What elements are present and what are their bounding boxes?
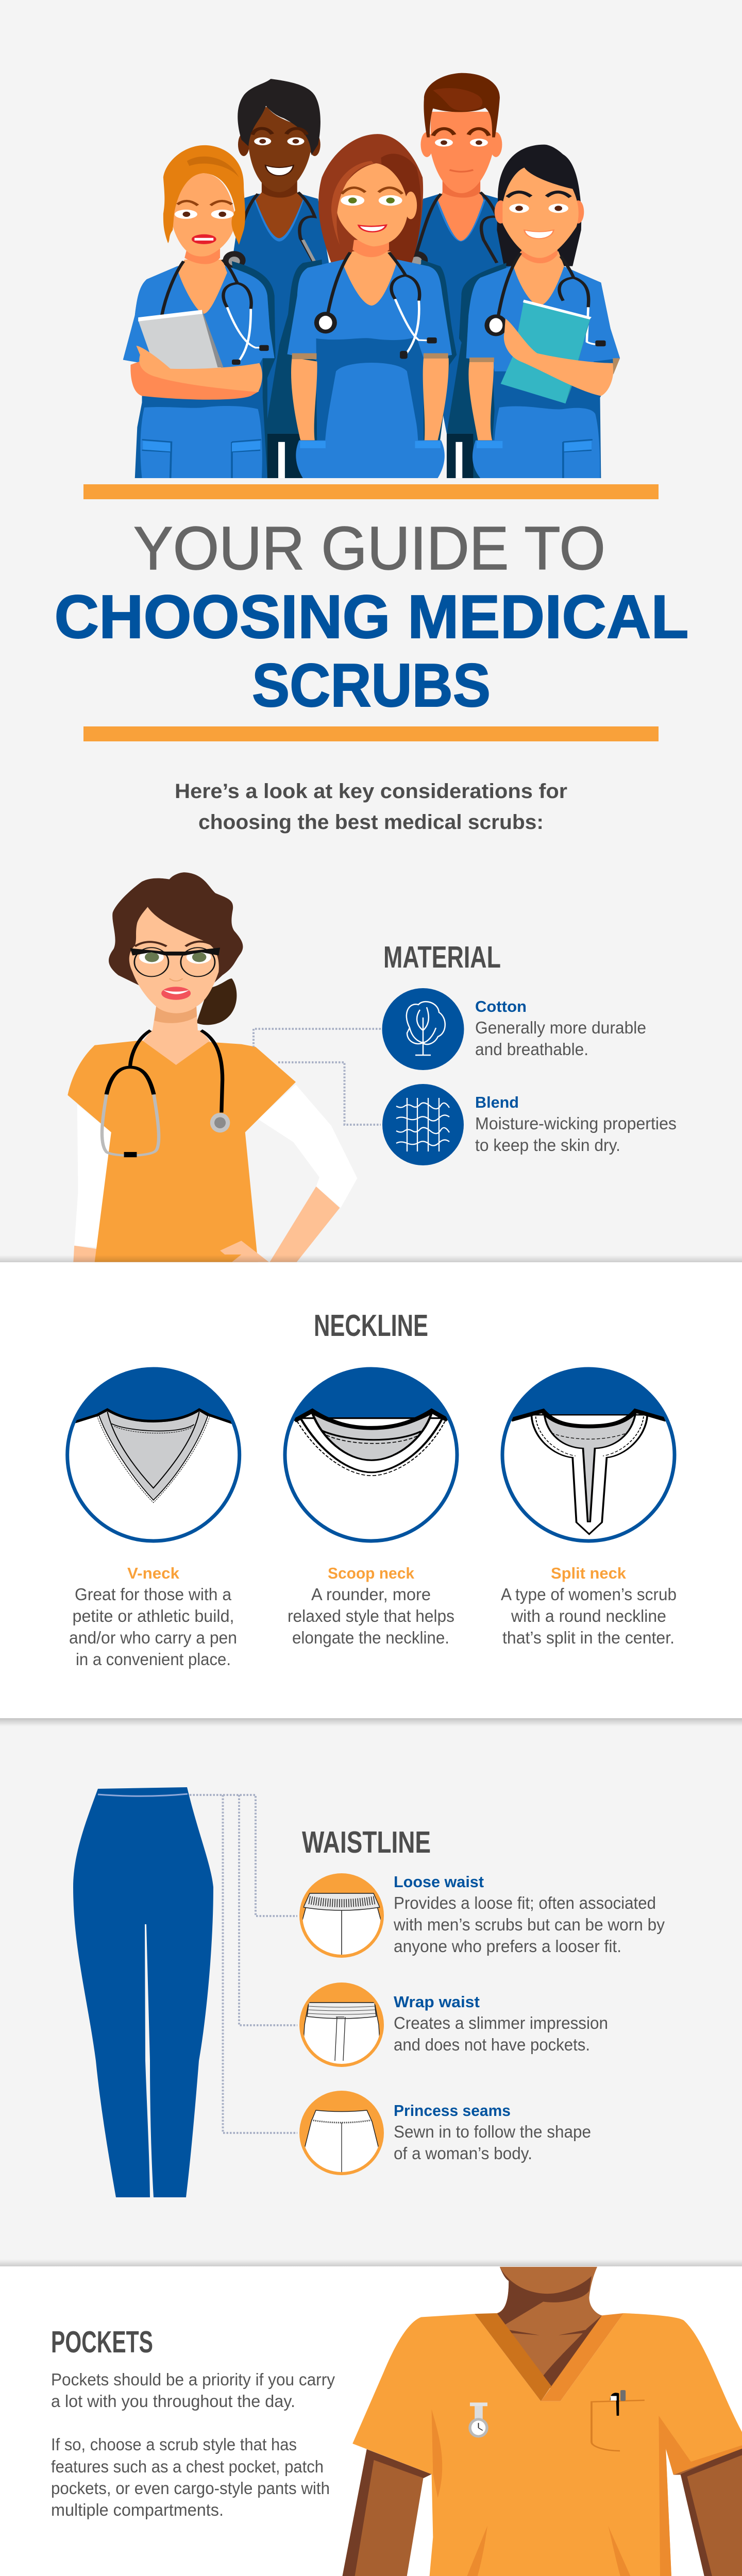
icon: v-neck — [65, 1367, 241, 1543]
illustration: woman in orange scrubs — [68, 872, 357, 1262]
decorative bar: top — [83, 484, 659, 499]
text: blend: Moisture-wicking properties — [475, 1114, 677, 1133]
person: front centre woman — [279, 134, 457, 478]
text: scoop neck — [288, 1564, 454, 1647]
text: cotton: Cotton — [475, 997, 527, 1015]
text: loose waist — [393, 1873, 665, 1956]
text: scoop neck: elongate the neckline. — [292, 1628, 449, 1647]
text: pockets description: multiple compartments. — [51, 2500, 224, 2519]
icon: cotton — [382, 988, 464, 1070]
text: pockets description: If so, choose a scrub style that has — [51, 2435, 297, 2454]
white gaps between legs — [278, 442, 462, 478]
text: loose waist: with men’s scrubs but can be worn by — [393, 1915, 665, 1934]
title — [55, 514, 688, 720]
heading: pockets: POCKETS — [51, 2325, 153, 2359]
icon: blend weave — [382, 1084, 464, 1165]
icon: chest pocket with pens — [591, 2390, 645, 2451]
heading: neckline: NECKLINE — [314, 1309, 428, 1343]
decorative bar: bottom — [83, 726, 659, 741]
text: blend: Blend — [475, 1093, 519, 1111]
heading: material: MATERIAL — [383, 940, 501, 974]
connector lines: material — [254, 1029, 381, 1125]
illustration: person in orange scrub top with pockets — [340, 2267, 742, 2576]
text: loose waist: Provides a loose fit; often associated — [394, 1893, 656, 1912]
text: wrap waist: Creates a slimmer impression — [394, 2013, 608, 2032]
text: princess seams — [394, 2102, 591, 2163]
text: wrap waist: and does not have pockets. — [394, 2035, 590, 2054]
title: CHOOSING MEDICAL — [55, 583, 688, 651]
title: SCRUBS — [252, 651, 491, 720]
text: princess seams: Sewn in to follow the shape — [394, 2122, 591, 2141]
icon: grey folder — [138, 310, 223, 371]
text: cotton: and breathable. — [475, 1040, 588, 1059]
shirt — [352, 2313, 742, 2576]
panel: pockets — [0, 2266, 742, 2576]
heading: waistline: WAISTLINE — [302, 1825, 431, 1859]
text: v-neck: petite or athletic build, — [72, 1606, 234, 1625]
text: pockets description — [51, 2370, 335, 2519]
text: wrap waist: Wrap waist — [394, 1993, 480, 2011]
person: back right man — [405, 73, 515, 478]
panel: hero and material background — [0, 0, 742, 1262]
text: scoop neck: Scoop neck — [328, 1564, 415, 1582]
text: princess seams: Princess seams — [394, 2102, 511, 2120]
text: v-neck: Great for those with a — [75, 1585, 232, 1604]
text: loose waist: Loose waist — [394, 1873, 484, 1891]
neck — [497, 2267, 602, 2389]
text: loose waist: anyone who prefers a looser fit. — [394, 1937, 621, 1956]
icon: loose waist — [299, 1873, 384, 1958]
illustration: blue scrub pants — [73, 1787, 213, 2197]
person: back left man — [223, 79, 333, 478]
title: YOUR GUIDE TO — [133, 514, 605, 583]
text: split neck: A type of women’s scrub — [501, 1585, 677, 1604]
text: blend — [475, 1093, 677, 1155]
text: split neck: Split neck — [551, 1564, 627, 1582]
person: right woman with teal folder — [459, 145, 620, 478]
icon: princess seams — [299, 2091, 384, 2175]
text: v-neck: and/or who carry a pen — [69, 1628, 237, 1647]
intro text: Here’s a look at key considerations for — [175, 780, 567, 803]
text: wrap waist — [394, 1993, 608, 2054]
text: split neck: with a round neckline — [511, 1606, 666, 1625]
intro text: choosing the best medical scrubs: — [198, 811, 544, 834]
icon: split neck — [502, 1359, 674, 1541]
text: pockets description: a lot with you throughout the day. — [51, 2392, 295, 2411]
text: pockets description: features such as a chest pocket, patch — [51, 2457, 324, 2476]
icon: stethoscope — [102, 1030, 230, 1157]
text: v-neck — [69, 1564, 237, 1669]
text: split neck: that’s split in the center. — [502, 1628, 674, 1647]
text: cotton — [475, 997, 646, 1059]
panel: neckline — [0, 1262, 742, 1718]
text: princess seams: of a woman’s body. — [394, 2144, 532, 2163]
text: v-neck: in a convenient place. — [76, 1650, 231, 1669]
icon: scoop neck — [285, 1359, 457, 1541]
person: left woman with grey folder — [123, 145, 276, 478]
icon: nurse fob watch — [468, 2402, 488, 2438]
text: pockets description: pockets, or even cargo-style pants with — [51, 2479, 330, 2498]
text: scoop neck: A rounder, more — [311, 1585, 431, 1604]
text: v-neck: V-neck — [127, 1564, 180, 1582]
text: scoop neck: relaxed style that helps — [288, 1606, 454, 1625]
intro text — [175, 780, 567, 834]
text: split neck — [501, 1564, 677, 1647]
arms — [340, 2447, 742, 2576]
connector lines: waistline — [190, 1795, 297, 2133]
icon: wrap waist — [299, 1982, 384, 2067]
panel: waistline — [0, 1718, 742, 2266]
illustration: team of five medical professionals — [123, 73, 620, 478]
text: cotton: Generally more durable — [475, 1018, 646, 1037]
white undershirt sleeves — [74, 1084, 357, 1247]
icon: teal folder — [501, 300, 592, 403]
text: pockets description: Pockets should be a priority if you carry — [51, 2370, 335, 2389]
text: blend: to keep the skin dry. — [475, 1136, 620, 1155]
